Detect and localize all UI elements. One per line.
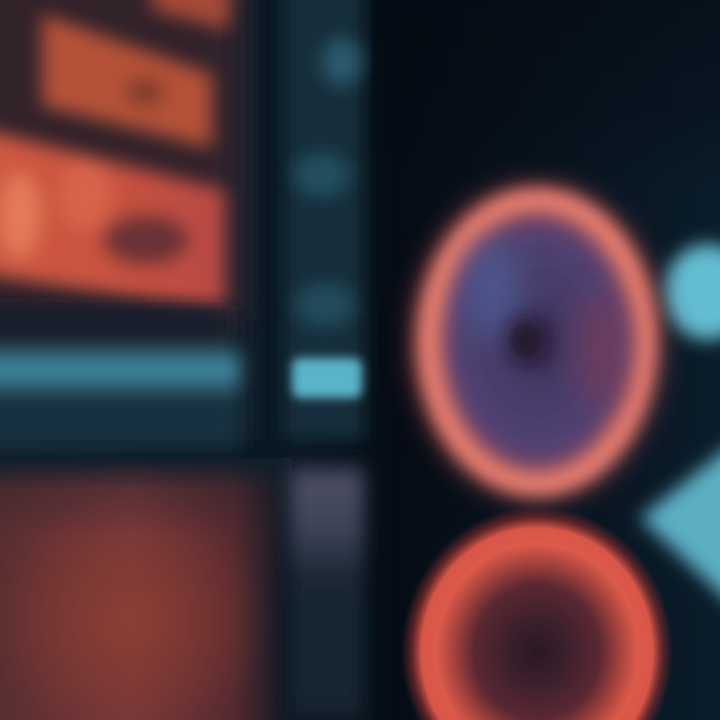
panel: large red sign <box>0 126 225 312</box>
icon: cyan glow shapes right <box>640 244 720 612</box>
vignette: darkening at top right <box>372 0 720 190</box>
panel: upper orange sign <box>42 14 212 148</box>
panel: left wall glow <box>0 0 245 440</box>
icon: ring reflection <box>400 506 674 720</box>
panel: centre teal column <box>284 0 364 440</box>
panel: floor reflection left <box>0 458 364 720</box>
panel: blue light band <box>0 306 240 446</box>
icon: glowing ring <box>413 184 661 500</box>
panel: top small orange sign <box>152 0 232 30</box>
